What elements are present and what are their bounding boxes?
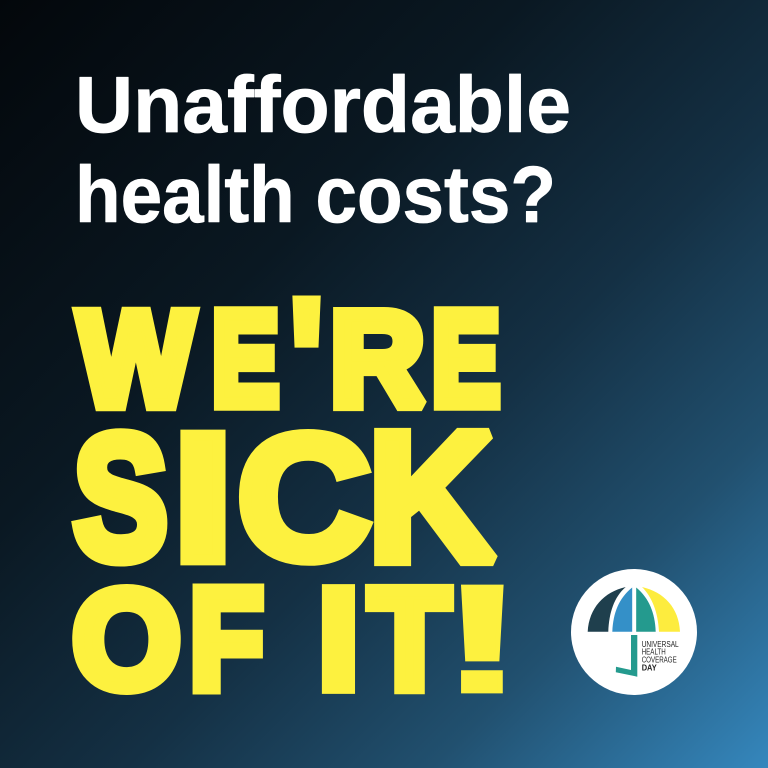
icon: umbrella canopy xyxy=(588,587,680,632)
slogan: WE'RE SICK OF IT!: E xyxy=(432,284,499,432)
slogan: WE'RE SICK OF IT!: I xyxy=(318,560,359,719)
slogan: WE'RE SICK OF IT!: E xyxy=(212,284,279,432)
logo text xyxy=(642,640,679,672)
logo white circle xyxy=(571,569,697,695)
slogan: WE'RE SICK OF IT!: I xyxy=(172,396,234,599)
slogan: WE'RE SICK OF IT!: S xyxy=(74,398,168,596)
slogan: WE'RE SICK OF IT!: R xyxy=(330,284,424,433)
logo text: HEALTH xyxy=(642,648,666,656)
slogan: WE'RE SICK OF IT! xyxy=(72,269,526,725)
slogan: WE'RE SICK OF IT!: C xyxy=(238,400,371,596)
slogan: WE'RE SICK OF IT!: O xyxy=(72,561,181,718)
slogan: WE'RE SICK OF IT!: W xyxy=(79,285,194,434)
heading: health costs? xyxy=(75,150,556,239)
logo text: DAY xyxy=(642,664,657,672)
slogan: WE'RE SICK OF IT!: T xyxy=(369,560,450,719)
logo text: COVERAGE xyxy=(642,656,677,664)
heading: Unaffordable xyxy=(75,60,571,149)
slogan: WE'RE SICK OF IT!: F xyxy=(190,559,263,718)
slogan: WE'RE SICK OF IT!: ! xyxy=(439,552,526,725)
logo text: UNIVERSAL xyxy=(642,640,679,649)
slogan: WE'RE SICK OF IT!: K xyxy=(368,394,495,599)
slogan: WE'RE SICK OF IT!: ' xyxy=(291,269,322,444)
logo: Universal Health Coverage Day xyxy=(571,569,697,695)
icon: umbrella handle xyxy=(616,635,637,677)
heading xyxy=(75,60,571,239)
